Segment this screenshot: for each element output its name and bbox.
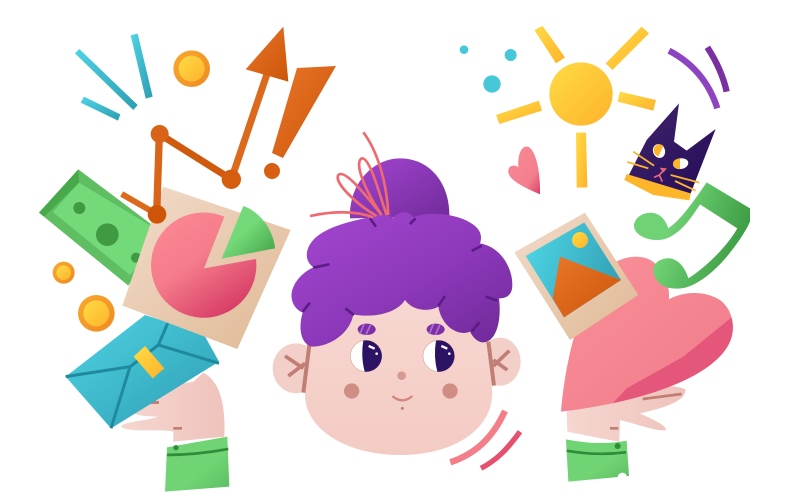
panel: character head (273, 132, 521, 468)
pie chart (151, 212, 256, 318)
icon: photo (514, 213, 638, 340)
left cuff (165, 437, 229, 492)
left eyebrow (358, 324, 376, 335)
motion lines (450, 411, 520, 468)
left ear (273, 343, 319, 393)
purple arcs (669, 47, 727, 108)
chin dot (401, 407, 404, 410)
pie chart card (122, 187, 291, 349)
hair (291, 212, 512, 347)
right hand (567, 386, 686, 442)
icon: small heart (508, 147, 540, 194)
hair bun (350, 158, 449, 218)
nose (397, 371, 406, 380)
cyan dots (460, 45, 517, 93)
icon: envelope (66, 315, 219, 428)
icon: cat (624, 103, 716, 200)
icon: sun (496, 26, 656, 188)
right eyebrow (427, 324, 445, 335)
right cheek (442, 383, 458, 399)
cyan burst lines (75, 34, 153, 121)
icon: banknote (39, 169, 163, 286)
icon: music note (634, 182, 750, 289)
hair strands (310, 132, 388, 217)
ear joins (303, 342, 494, 393)
line chart with arrow (122, 27, 288, 224)
panel: work side (39, 27, 291, 492)
icon: big heart (561, 256, 733, 412)
icon: small coin (53, 262, 75, 284)
mouth (392, 396, 412, 400)
left cheek (344, 383, 359, 399)
right cuff (566, 439, 629, 482)
icon: large coin (78, 295, 115, 332)
face (305, 297, 492, 455)
right eye (423, 340, 455, 372)
right ear (479, 338, 521, 386)
pie slice (222, 206, 275, 259)
panel: leisure side (460, 26, 750, 482)
left eye (350, 340, 382, 372)
exclamation mark (264, 66, 336, 179)
left hand (121, 373, 225, 442)
icon: top coin (173, 50, 210, 87)
